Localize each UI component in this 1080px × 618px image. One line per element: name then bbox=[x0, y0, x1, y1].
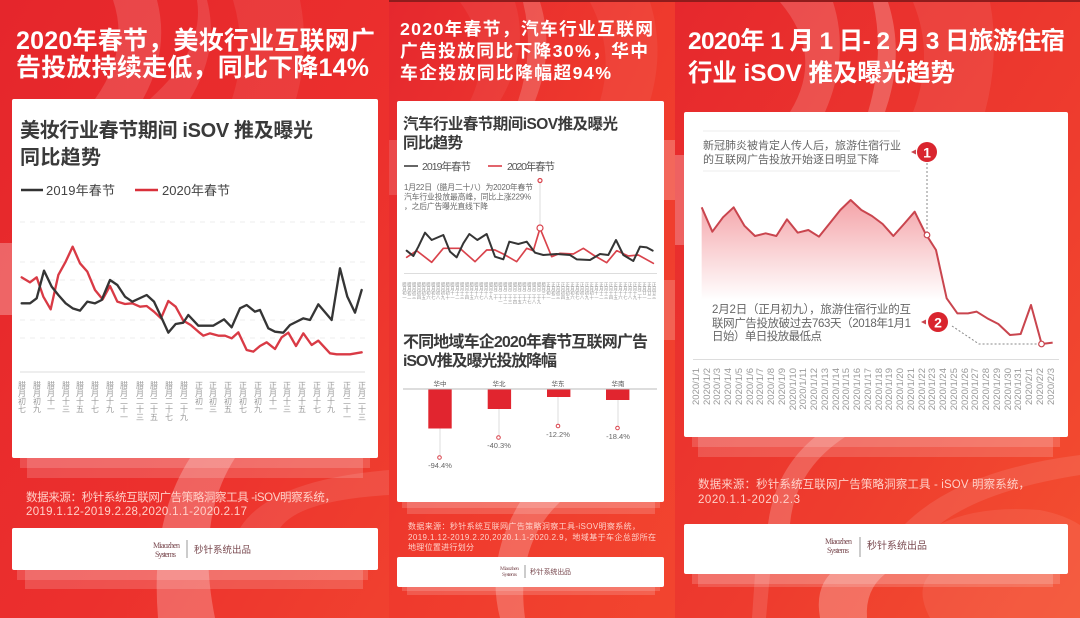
line chart: auto 2019 vs 2020: 腊月初一 bbox=[402, 282, 408, 300]
area chart: travel trend: 2020/1/10 bbox=[788, 368, 799, 410]
source note: auto: 2019.1.12-2019.2.20,2020.1.1-2020.2.9，地域基于车企总部所在 bbox=[408, 532, 656, 542]
heading: auto trend: 汽车行业春节期间iSOV推及曝光 bbox=[403, 114, 618, 133]
area chart: travel trend: 2020/1/26 bbox=[960, 368, 971, 410]
line chart: auto 2019 vs 2020: 正月初五 bbox=[565, 282, 571, 300]
heading: beauty chart: 同比趋势 bbox=[20, 146, 101, 169]
line chart: beauty 2019 vs 2020: 腊月十七 bbox=[90, 381, 100, 413]
legend: auto trend bbox=[404, 160, 555, 173]
area chart: travel trend: 2020/1/8 bbox=[766, 368, 777, 405]
callout: auto peak note: ，之后广告曝光直线下降 bbox=[404, 201, 488, 211]
line chart: auto 2019 vs 2020: 腊月初七 bbox=[430, 282, 436, 300]
bar chart: regional decline: 华南 bbox=[612, 379, 625, 388]
area chart: travel trend: 2020/1/9 bbox=[777, 368, 788, 405]
line chart: beauty 2019 vs 2020: 腊月十三 bbox=[62, 381, 70, 413]
line chart: auto 2019 vs 2020: 腊月十六 bbox=[474, 282, 480, 301]
line chart: beauty 2019 vs 2020 bbox=[18, 222, 368, 422]
line chart: auto 2019 vs 2020: 正月十五 bbox=[613, 282, 619, 300]
title: auto industry: 2020年春节，汽车行业互联网 bbox=[400, 18, 653, 39]
line chart: beauty 2019 vs 2020: 腊月初九 bbox=[32, 381, 42, 414]
line chart: auto 2019 vs 2020: 腊月二十四 bbox=[512, 282, 518, 304]
area chart: travel trend: 2020/1/2 bbox=[702, 368, 713, 405]
line chart: auto 2019 vs 2020: 腊月初十 bbox=[445, 282, 451, 301]
line chart: auto 2019 vs 2020: 腊月初九 bbox=[440, 282, 446, 301]
panel: travel iSOV bbox=[684, 112, 1068, 437]
title: beauty industry: 2020年春节，美妆行业互联网广 bbox=[16, 27, 375, 55]
title: auto industry: 广告投放同比下降30%，华中 bbox=[400, 41, 648, 61]
callout 2: lowest point: 2月2日（正月初九），旅游住宿行业的互 bbox=[712, 302, 911, 316]
area chart: travel trend: 2020/1/5 bbox=[734, 368, 745, 405]
source note: beauty bbox=[26, 490, 336, 518]
line chart: auto 2019 vs 2020: 腊月二十八 bbox=[531, 282, 537, 304]
line chart: auto 2019 vs 2020: 腊月十四 bbox=[464, 282, 470, 300]
area chart: travel trend: 2020/1/3 bbox=[712, 368, 723, 405]
callout 1: decline begins: 1 bbox=[923, 144, 931, 160]
line chart: beauty 2019 vs 2020: 腊月十一 bbox=[46, 381, 56, 413]
area chart: travel trend: 2020/1/14 bbox=[831, 368, 842, 410]
area chart: travel trend: 2020/1/28 bbox=[981, 368, 992, 410]
area chart: travel trend: 2020/1/23 bbox=[927, 368, 938, 410]
line chart: beauty 2019 vs 2020: 正月十五 bbox=[298, 381, 306, 413]
source note: travel: 2020.1.1-2020.2.3 bbox=[698, 494, 800, 506]
source note: travel bbox=[698, 477, 1030, 506]
bar chart: regional decline bbox=[403, 379, 657, 470]
footer card: auto: 秒针系统出品 bbox=[530, 567, 571, 576]
line chart: auto 2019 vs 2020: 腊月初二 bbox=[406, 282, 412, 300]
source note: beauty: 2019.1.12-2019.2.28,2020.1.1-2020.2.17 bbox=[26, 506, 247, 518]
line chart: beauty 2019 vs 2020: 正月初五 bbox=[224, 381, 232, 413]
line chart: auto 2019 vs 2020: 正月廿三 bbox=[651, 282, 657, 300]
bar chart: regional decline: -94.4% bbox=[428, 461, 452, 470]
line chart: auto 2019 vs 2020: 正月廿二 bbox=[646, 282, 652, 300]
line chart: beauty 2019 vs 2020: 正月二十三 bbox=[358, 381, 366, 421]
callout 2: lowest point: 日始）单日投放最低点 bbox=[712, 329, 822, 343]
area chart: travel trend: 2020/1/20 bbox=[895, 368, 906, 410]
line chart: auto 2019 vs 2020: 正月初一 bbox=[546, 282, 552, 300]
line chart: auto 2019 vs 2020: 腊月初六 bbox=[426, 282, 432, 301]
heading: auto trend bbox=[403, 114, 618, 152]
callout 1: decline begins: 的互联网广告投放开始逐日明显下降 bbox=[703, 152, 879, 166]
source note: auto bbox=[408, 521, 656, 552]
line chart: auto 2019 vs 2020: 正月十六 bbox=[618, 282, 624, 301]
line chart: auto 2019 vs 2020: 正月十一 bbox=[594, 282, 600, 300]
title: beauty industry: 告投放持续走低，同比下降14% bbox=[16, 54, 369, 82]
bar chart: regional decline: -18.4% bbox=[606, 432, 630, 441]
red background: right poster bbox=[675, 0, 1080, 618]
line chart: auto 2019 vs 2020: 腊月二十九 bbox=[536, 282, 542, 305]
footer card: beauty: 秒针系统出品 bbox=[194, 544, 251, 556]
callout 1: decline begins bbox=[703, 131, 937, 238]
legend: beauty chart: 2019年春节 bbox=[46, 183, 115, 198]
line chart: auto 2019 vs 2020: 正月廿一 bbox=[642, 282, 648, 300]
line chart: auto 2019 vs 2020: 正月初四 bbox=[560, 282, 566, 300]
heading: auto trend: 同比趋势 bbox=[403, 134, 463, 152]
line chart: auto 2019 vs 2020: 腊月十二 bbox=[454, 282, 460, 300]
area chart: travel trend: 2020/1/21 bbox=[906, 368, 917, 410]
line chart: beauty 2019 vs 2020: 正月初三 bbox=[208, 381, 218, 413]
callout 1: decline begins: 新冠肺炎被肯定人传人后，旅游住宿行业 bbox=[703, 138, 901, 152]
line chart: auto 2019 vs 2020: 正月十四 bbox=[608, 282, 614, 300]
legend: auto trend: 2020年春节 bbox=[507, 160, 555, 173]
line chart: auto 2019 vs 2020: 正月初八 bbox=[579, 282, 585, 300]
area chart: travel trend: 2020/1/30 bbox=[1003, 368, 1014, 410]
heading: regional decline bbox=[403, 332, 648, 370]
footer card: travel: 秒针系统出品 bbox=[867, 539, 927, 552]
area chart: travel trend: 2020/1/12 bbox=[809, 368, 820, 410]
area chart: travel trend: 2020/1/19 bbox=[884, 368, 895, 410]
line chart: beauty 2019 vs 2020: 腊月二十九 bbox=[180, 381, 188, 422]
line chart: auto 2019 vs 2020: 正月初三 bbox=[555, 282, 561, 300]
source note: travel: 数据来源：秒针系统互联网广告策略洞察工具 - iSOV 明察系统， bbox=[698, 477, 1030, 491]
footer card: auto bbox=[397, 557, 664, 587]
bar chart: regional decline: -40.3% bbox=[487, 441, 511, 450]
footer card: travel: Systems bbox=[827, 546, 849, 555]
area chart: travel trend: 2020/1/6 bbox=[745, 368, 756, 405]
line chart: auto 2019 vs 2020: 正月十三 bbox=[603, 282, 609, 300]
area chart: travel trend: 2020/1/22 bbox=[917, 368, 928, 410]
line chart: beauty 2019 vs 2020: 正月十三 bbox=[282, 381, 292, 413]
callout: auto peak note: 汽车行业投放最高峰，同比上涨229% bbox=[404, 192, 531, 202]
line chart: auto 2019 vs 2020: 腊月二十七 bbox=[526, 282, 532, 304]
callout: auto peak note: 1月22日（腊月二十八）为2020年春节 bbox=[404, 182, 533, 192]
line chart: beauty 2019 vs 2020: 腊月二十三 bbox=[136, 381, 144, 421]
source note: auto: 地理位置进行划分 bbox=[408, 542, 474, 552]
legend: beauty chart bbox=[21, 183, 230, 198]
title: travel industry: 行业 iSOV 推及曝光趋势 bbox=[688, 59, 955, 87]
line chart: beauty 2019 vs 2020: 正月初一 bbox=[194, 381, 204, 413]
line chart: beauty 2019 vs 2020: 正月十七 bbox=[312, 381, 322, 413]
area chart: travel trend: 2020/1/15 bbox=[841, 368, 852, 410]
line chart: beauty 2019 vs 2020: 腊月二十七 bbox=[164, 381, 174, 421]
title: travel industry: 2020年 1 月 1 日- 2 月 3 日旅游住宿 bbox=[688, 27, 1065, 55]
line chart: auto 2019 vs 2020: 腊月二十二 bbox=[502, 282, 508, 304]
area chart: travel trend: 2020/1/17 bbox=[863, 368, 874, 410]
line chart: beauty 2019 vs 2020: 腊月二十一 bbox=[120, 381, 128, 421]
line chart: auto 2019 vs 2020: 腊月初八 bbox=[435, 282, 441, 300]
red background: left poster bbox=[0, 0, 389, 618]
callout 2: lowest point: 2 bbox=[934, 314, 942, 330]
line chart: auto 2019 vs 2020: 腊月十五 bbox=[469, 282, 475, 300]
heading: beauty chart: 美妆行业春节期间 iSOV 推及曝光 bbox=[20, 119, 313, 142]
area chart: travel trend: 2020/1/18 bbox=[874, 368, 885, 410]
footer card: beauty bbox=[12, 528, 378, 570]
legend: beauty chart: 2020年春节 bbox=[162, 183, 230, 198]
title: auto industry bbox=[400, 18, 653, 83]
area chart: travel trend: 2020/2/2 bbox=[1035, 368, 1046, 405]
line chart: auto 2019 vs 2020: 正月十七 bbox=[622, 282, 628, 300]
line chart: auto 2019 vs 2020: 正月初七 bbox=[574, 282, 580, 300]
area chart: travel trend: 2020/1/27 bbox=[970, 368, 981, 410]
area chart: travel trend: 2020/1/11 bbox=[798, 368, 809, 410]
line chart: auto 2019 vs 2020: 正月初十 bbox=[589, 282, 595, 301]
line chart: auto 2019 vs 2020: 腊月初五 bbox=[421, 282, 427, 300]
line chart: auto 2019 vs 2020: 正月初六 bbox=[570, 282, 576, 301]
panel: beauty iSOV trend bbox=[12, 99, 378, 458]
area chart: travel trend: 2020/1/13 bbox=[820, 368, 831, 410]
title: travel industry bbox=[688, 27, 1065, 87]
line chart: auto 2019 vs 2020: 腊月三十 bbox=[541, 282, 547, 301]
heading: regional decline: iSOV推及曝光投放降幅 bbox=[403, 351, 557, 370]
line chart: beauty 2019 vs 2020: 腊月初七 bbox=[18, 381, 26, 413]
bar chart: regional decline: 华东 bbox=[552, 379, 565, 388]
line chart: beauty 2019 vs 2020: 腊月十九 bbox=[106, 381, 114, 414]
line chart: auto 2019 vs 2020: 腊月二十 bbox=[493, 282, 499, 301]
title: auto industry: 车企投放同比降幅超94% bbox=[400, 62, 611, 83]
callout: auto peak note bbox=[404, 182, 533, 211]
line chart: beauty 2019 vs 2020: 正月十一 bbox=[268, 381, 278, 413]
area chart: travel trend: 2020/2/1 bbox=[1024, 368, 1035, 405]
bar chart: regional decline: 华北 bbox=[492, 379, 506, 388]
area chart: travel trend bbox=[691, 200, 1059, 410]
heading: regional decline: 不同地域车企2020年春节互联网广告 bbox=[403, 332, 648, 351]
line chart: auto 2019 vs 2020: 正月二十 bbox=[637, 282, 643, 301]
line chart: auto 2019 vs 2020: 正月初九 bbox=[584, 282, 590, 301]
footer card: auto: Miaozhen bbox=[500, 566, 519, 572]
area chart: travel trend: 2020/1/24 bbox=[938, 368, 949, 410]
callout 2: lowest point bbox=[712, 302, 1044, 347]
line chart: beauty 2019 vs 2020: 正月初九 bbox=[254, 381, 262, 414]
area chart: travel trend: 2020/1/29 bbox=[992, 368, 1003, 410]
footer card: travel: Miaozhen bbox=[825, 537, 852, 546]
line chart: beauty 2019 vs 2020: 正月初七 bbox=[238, 381, 248, 413]
line chart: auto 2019 vs 2020: 腊月十一 bbox=[450, 282, 456, 300]
footer card: auto: Systems bbox=[502, 572, 517, 578]
line chart: auto 2019 vs 2020: 腊月十九 bbox=[488, 282, 494, 301]
line chart: auto 2019 vs 2020 bbox=[402, 178, 657, 305]
line chart: auto 2019 vs 2020: 腊月二十一 bbox=[498, 282, 504, 304]
source note: auto: 数据来源：秒针系统互联网广告策略洞察工具-iSOV明察系统， bbox=[408, 521, 640, 531]
line chart: auto 2019 vs 2020: 腊月十三 bbox=[459, 282, 465, 300]
callout 2: lowest point: 联网广告投放破过去763天（2018年1月1 bbox=[712, 316, 911, 330]
panel: auto iSOV bbox=[397, 101, 664, 502]
line chart: auto 2019 vs 2020: 腊月十八 bbox=[483, 282, 489, 300]
legend: auto trend: 2019年春节 bbox=[422, 160, 471, 173]
area chart: travel trend: 2020/2/3 bbox=[1046, 368, 1057, 405]
area chart: travel trend: 2020/1/25 bbox=[949, 368, 960, 410]
line chart: auto 2019 vs 2020: 正月十二 bbox=[598, 282, 604, 300]
line chart: auto 2019 vs 2020: 正月初二 bbox=[550, 282, 556, 300]
source note: beauty: 数据来源：秒针系统互联网广告策略洞察工具 -iSOV明察系统， bbox=[26, 490, 336, 504]
bar chart: regional decline: 华中 bbox=[434, 379, 446, 388]
line chart: auto 2019 vs 2020: 腊月十七 bbox=[478, 282, 484, 300]
line chart: beauty 2019 vs 2020: 腊月二十五 bbox=[150, 381, 158, 421]
footer card: beauty: Systems bbox=[155, 550, 176, 559]
red background: middle poster bbox=[389, 0, 675, 618]
line chart: auto 2019 vs 2020: 腊月初四 bbox=[416, 282, 422, 300]
area chart: travel trend: 2020/1/7 bbox=[755, 368, 766, 405]
area chart: travel trend: 2020/1/31 bbox=[1013, 368, 1024, 410]
line chart: auto 2019 vs 2020: 腊月初三 bbox=[411, 282, 417, 300]
area chart: travel trend: 2020/1/16 bbox=[852, 368, 863, 410]
line chart: beauty 2019 vs 2020: 正月二十一 bbox=[342, 381, 352, 421]
line chart: auto 2019 vs 2020: 腊月二十五 bbox=[517, 282, 523, 304]
title: beauty industry bbox=[16, 27, 375, 82]
line chart: auto 2019 vs 2020: 正月十九 bbox=[632, 282, 638, 301]
footer card: travel bbox=[684, 524, 1068, 574]
area chart: travel trend: 2020/1/4 bbox=[723, 368, 734, 405]
footer card: beauty: Miaozhen bbox=[153, 541, 180, 550]
line chart: auto 2019 vs 2020: 腊月二十三 bbox=[507, 282, 513, 304]
area chart: travel trend: 2020/1/1 bbox=[691, 368, 702, 405]
line chart: auto 2019 vs 2020: 正月十八 bbox=[627, 282, 633, 300]
line chart: beauty 2019 vs 2020: 正月十九 bbox=[326, 381, 336, 414]
bar chart: regional decline: -12.2% bbox=[546, 430, 570, 439]
line chart: auto 2019 vs 2020: 腊月二十六 bbox=[522, 282, 528, 305]
heading: beauty chart bbox=[20, 119, 313, 169]
line chart: beauty 2019 vs 2020: 腊月十五 bbox=[76, 381, 84, 413]
